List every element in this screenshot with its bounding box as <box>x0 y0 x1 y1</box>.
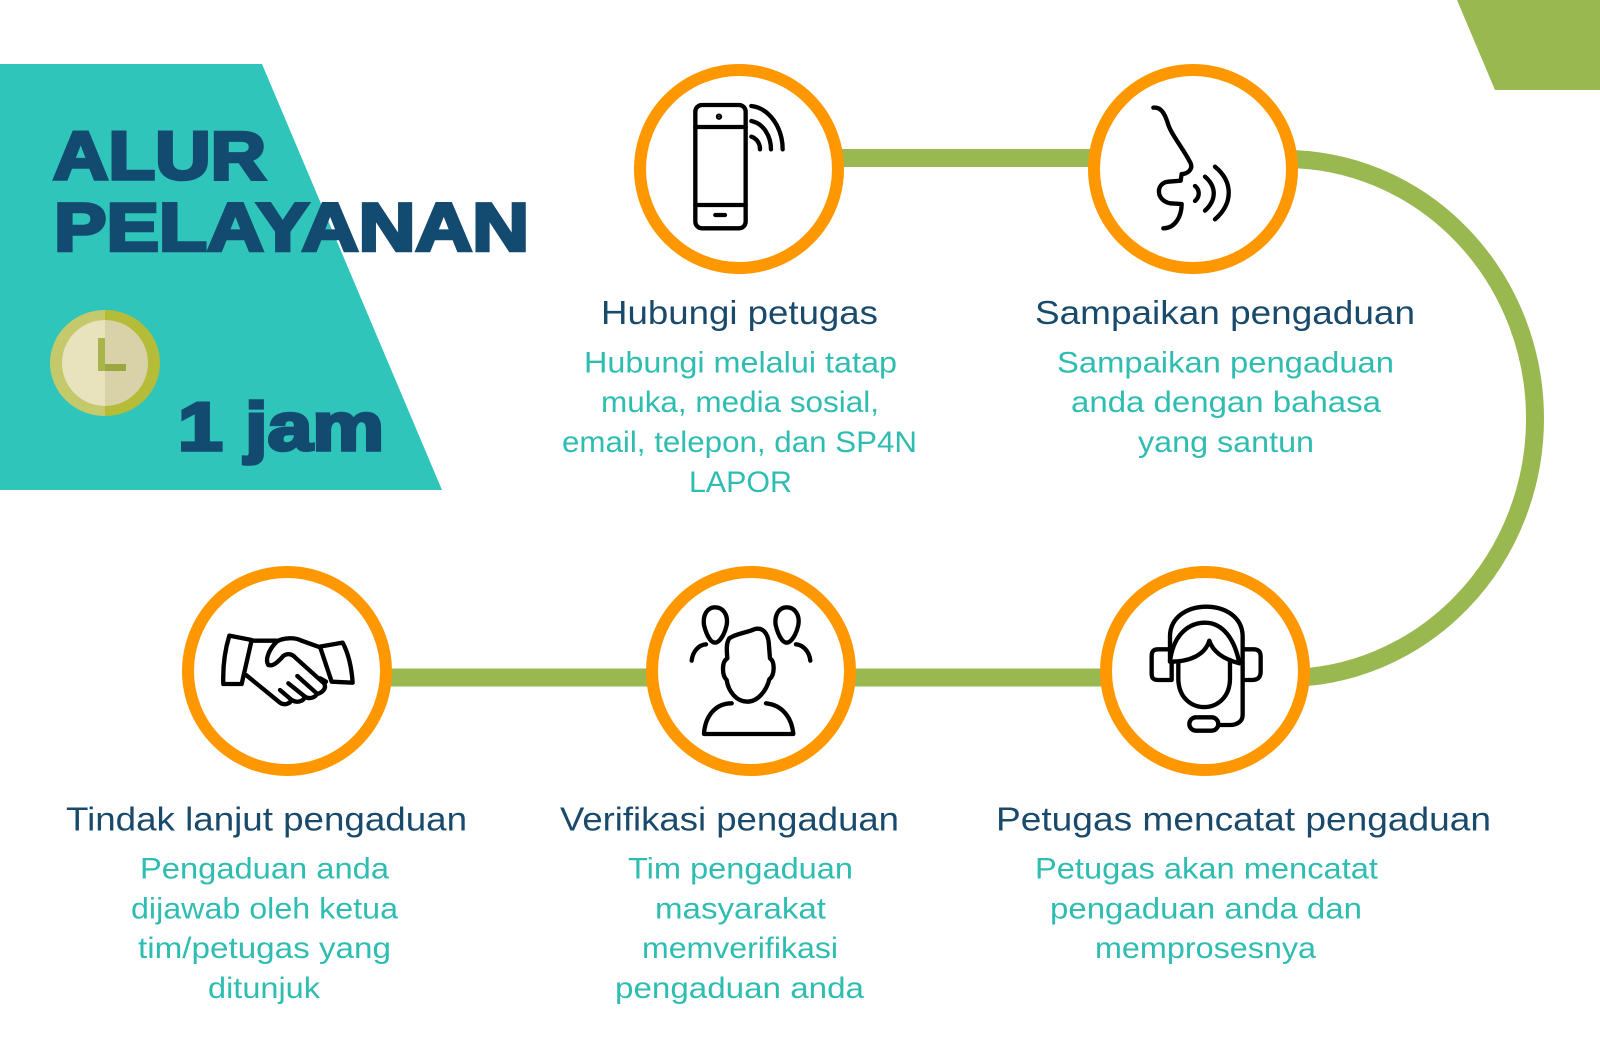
step 3: petugas mencatat pengaduan <box>996 572 1491 965</box>
step 2 description <box>1057 346 1394 459</box>
step 2 circle <box>1094 70 1292 268</box>
icon: speaking face <box>1153 108 1229 228</box>
step 1 description: email, telepon, dan SP4N <box>562 426 917 459</box>
title: PELAYANAN <box>54 190 529 266</box>
step 5 circle <box>188 572 386 770</box>
icon: phone with signal <box>695 105 783 228</box>
icon: person with two others <box>692 607 810 734</box>
step 5 heading: Tindak lanjut pengaduan <box>66 800 467 838</box>
title: ALUR <box>53 118 266 194</box>
step 5 description: dijawab oleh ketua <box>131 892 398 926</box>
step 4 circle <box>652 572 850 770</box>
icon: clock <box>50 310 160 416</box>
step 1 circle <box>640 70 838 268</box>
connector path <box>385 158 1535 678</box>
step 5 description: tim/petugas yang <box>138 932 391 965</box>
title <box>53 118 529 266</box>
step 3 description: memprosesnya <box>1095 932 1316 965</box>
step 1 description <box>562 346 917 499</box>
step 1 heading: Hubungi petugas <box>601 294 878 331</box>
step 3 description: Petugas akan mencatat <box>1035 852 1379 886</box>
step 4 description: pengaduan anda <box>615 972 864 1005</box>
step 2 description: Sampaikan pengaduan <box>1057 346 1394 380</box>
step 5 description <box>131 852 398 1005</box>
panel: title background <box>0 64 442 490</box>
corner accent <box>1457 0 1600 90</box>
icon: handshake <box>223 636 353 704</box>
step 2 description: yang santun <box>1138 426 1314 459</box>
step 4: verifikasi pengaduan <box>560 572 899 1005</box>
step 4 description: memverifikasi <box>642 932 838 965</box>
step 3 heading: Petugas mencatat pengaduan <box>996 800 1491 838</box>
step 5: tindak lanjut pengaduan <box>66 572 467 1005</box>
step 3 description <box>1035 852 1379 965</box>
step 5 description: Pengaduan anda <box>140 852 389 886</box>
step 2: sampaikan pengaduan <box>1035 70 1415 459</box>
step 1 description: LAPOR <box>689 466 792 499</box>
step 4 heading: Verifikasi pengaduan <box>560 800 899 838</box>
step 1: hubungi petugas <box>562 70 917 499</box>
step 4 description: Tim pengaduan <box>628 852 853 886</box>
duration label: 1 jam <box>178 389 384 465</box>
step 5 description: ditunjuk <box>208 972 321 1005</box>
step 4 description: masyarakat <box>655 892 827 926</box>
icon: headset agent <box>1152 607 1261 731</box>
step 4 description <box>615 852 864 1005</box>
step 3 description: pengaduan anda dan <box>1050 892 1362 926</box>
step 2 heading: Sampaikan pengaduan <box>1035 294 1415 331</box>
step 2 description: anda dengan bahasa <box>1071 386 1381 419</box>
step 1 description: Hubungi melalui tatap <box>584 346 897 380</box>
step 1 description: muka, media sosial, <box>601 386 879 419</box>
step 3 circle <box>1106 572 1304 770</box>
